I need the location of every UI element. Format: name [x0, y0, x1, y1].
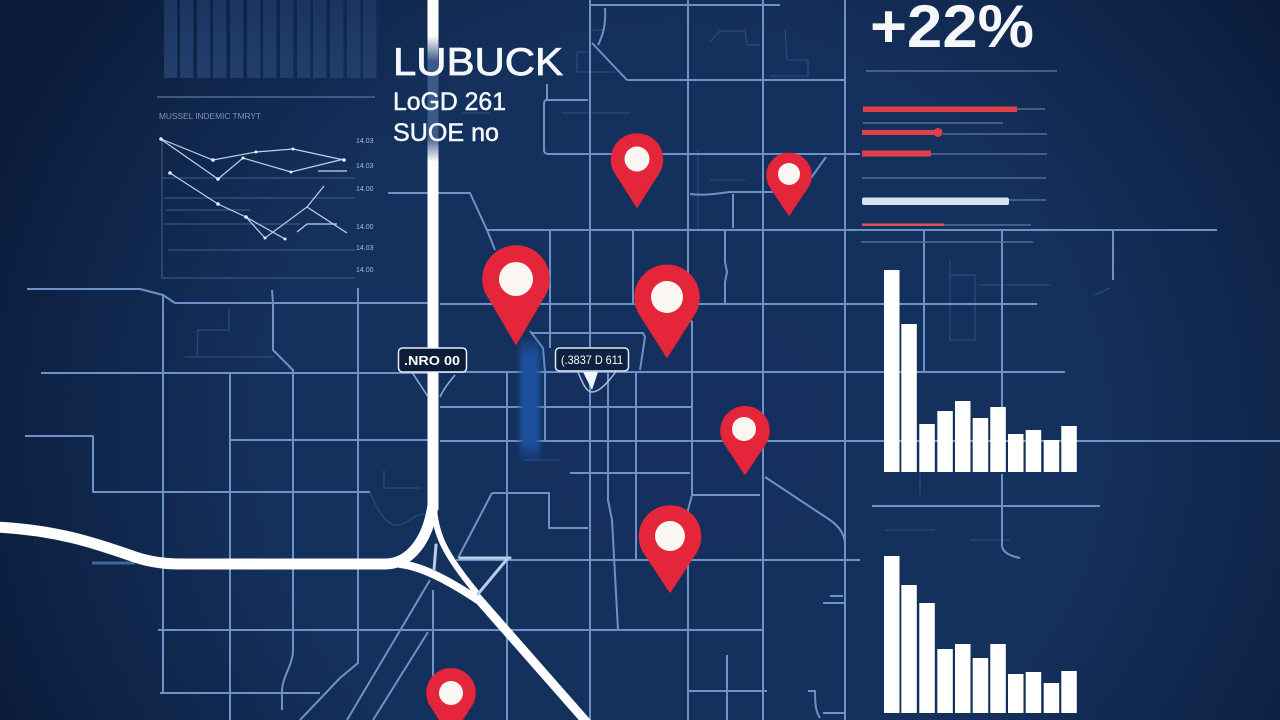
- chart axis values: 14.03: [356, 245, 374, 252]
- chart lines: [161, 139, 347, 239]
- callout text: .NRO 00: [404, 354, 460, 368]
- bar chart 1: [884, 270, 1077, 472]
- map pin G: [427, 669, 475, 720]
- highway: main interchange and southeast road: [0, 505, 590, 720]
- callout box: [398, 348, 466, 372]
- callout leader lines: [412, 372, 455, 397]
- map pin F: [640, 506, 700, 592]
- chart axis values: [356, 138, 374, 274]
- thin red bar: [862, 224, 944, 226]
- line chart panel: [157, 97, 375, 278]
- chart axis values: 14.00: [356, 186, 374, 193]
- red bar 3: [862, 150, 931, 156]
- chart axis values: 14.00: [356, 224, 374, 231]
- chart data points: [159, 137, 346, 240]
- highway: north-south road: [428, 0, 438, 510]
- subtitle line 1: LoGD 261: [393, 88, 506, 116]
- callout text: (.3837 D 611: [561, 353, 623, 367]
- map: dim road stub: [92, 562, 135, 564]
- chart axis values: 14.03: [356, 138, 374, 145]
- callout pointer: [578, 370, 617, 392]
- map pin C: [612, 134, 662, 207]
- map pin A: [483, 246, 549, 344]
- callout box: [556, 348, 628, 371]
- title: LUBUCK: LUBUCK: [393, 41, 563, 84]
- chart header rule: [157, 96, 375, 98]
- road label: left callout: [398, 348, 466, 397]
- track lines: [861, 71, 1057, 242]
- top-left striped bar panel: [164, 0, 376, 78]
- heading block: [393, 41, 563, 147]
- light bar: [862, 198, 1009, 205]
- subtitle line 2: SUOE no: [393, 119, 499, 147]
- map pin B: [635, 265, 699, 357]
- chart caption: MUSSEL INDEMIC TMRYT: [159, 111, 261, 121]
- map: blue highlighted corridor: [520, 335, 540, 463]
- chart axis values: 14.03: [356, 163, 374, 170]
- map pin E: [721, 407, 769, 474]
- callout pointer tip: [583, 372, 598, 390]
- chart axes and grid: [162, 138, 355, 278]
- chart axis values: 14.00: [356, 267, 374, 274]
- red bar 1: [863, 106, 1017, 112]
- horizontal bar panel: [861, 71, 1057, 242]
- map pin D: [767, 153, 811, 215]
- red bar 2: [862, 128, 942, 137]
- map: faint minor roads: [185, 30, 1110, 540]
- bar chart 2: [884, 556, 1077, 713]
- road label: right callout: [556, 348, 628, 392]
